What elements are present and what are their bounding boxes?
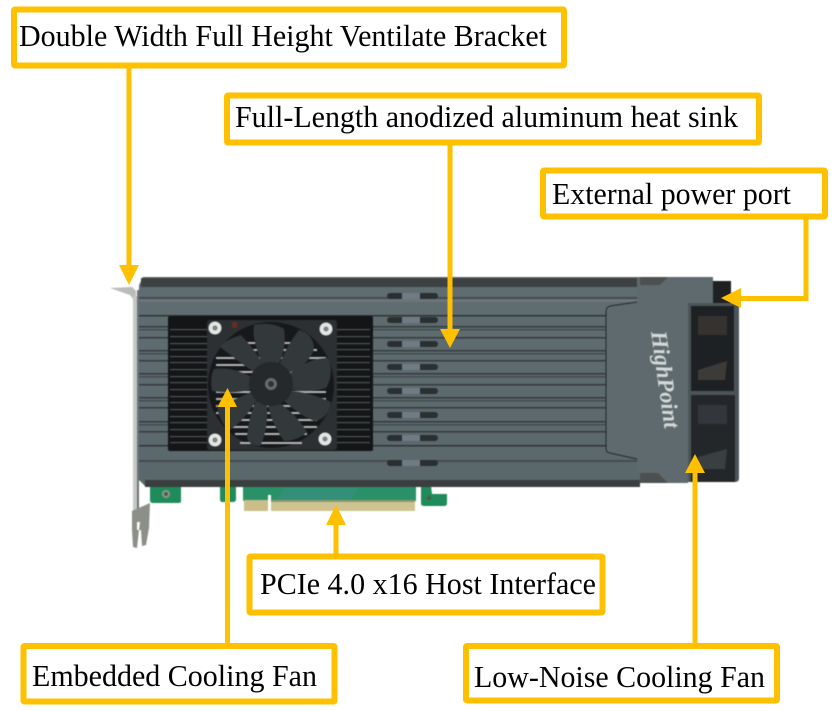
embedded cooling fan	[207, 320, 337, 450]
product photo: expansion card	[110, 277, 739, 548]
callout: embedded cooling fan	[24, 646, 334, 702]
callout: external power port	[543, 170, 825, 216]
heat sink body	[139, 277, 640, 487]
fan blades	[211, 324, 331, 446]
low-noise blower fan housing	[688, 303, 739, 482]
arrow: embedded fan	[218, 388, 237, 645]
end cover with logo	[606, 277, 713, 483]
circuit board and gold edge connector	[150, 486, 447, 512]
callout: low-noise cooling fan: Low-Noise Cooling Fan	[474, 659, 765, 694]
fan wire detail	[232, 322, 237, 328]
callout: bracket	[14, 10, 564, 66]
callout: bracket: Double Width Full Height Ventilate Bracket	[19, 18, 547, 53]
fan mount screws	[208, 322, 332, 446]
arrow: heat sink	[440, 143, 460, 348]
mounting bracket	[110, 287, 150, 548]
arrow: low-noise fan	[685, 454, 705, 644]
callout: external power port: External power port	[552, 176, 791, 211]
logo: HighPoint: HighPoint	[646, 328, 685, 430]
rear power connector	[713, 281, 731, 305]
callout: PCIe host interface	[250, 556, 602, 612]
arrow: PCIe interface	[326, 505, 346, 556]
vent slots	[387, 293, 438, 466]
callout: PCIe host interface: PCIe 4.0 x16 Host Interface	[260, 566, 596, 601]
callout: low-noise cooling fan	[466, 646, 777, 700]
arrow: external power port	[721, 217, 808, 308]
callout: heat sink: Full-Length anodized aluminum heat sink	[235, 99, 738, 134]
black fin heat sink window	[168, 316, 373, 451]
callout: embedded cooling fan: Embedded Cooling Fan	[32, 658, 317, 693]
fan hub	[249, 362, 293, 406]
arrow: bracket	[119, 66, 139, 285]
